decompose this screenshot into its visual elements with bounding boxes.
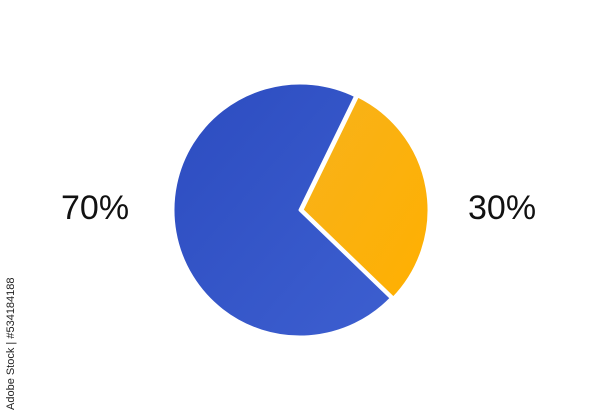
slice: 70% blue (173, 83, 391, 337)
label: 70%: 70% (61, 189, 129, 227)
stock id text: Adobe Stock | #534184188 (5, 277, 17, 410)
label: 30%: 30% (468, 189, 536, 227)
slice: 30% orange (302, 96, 429, 298)
